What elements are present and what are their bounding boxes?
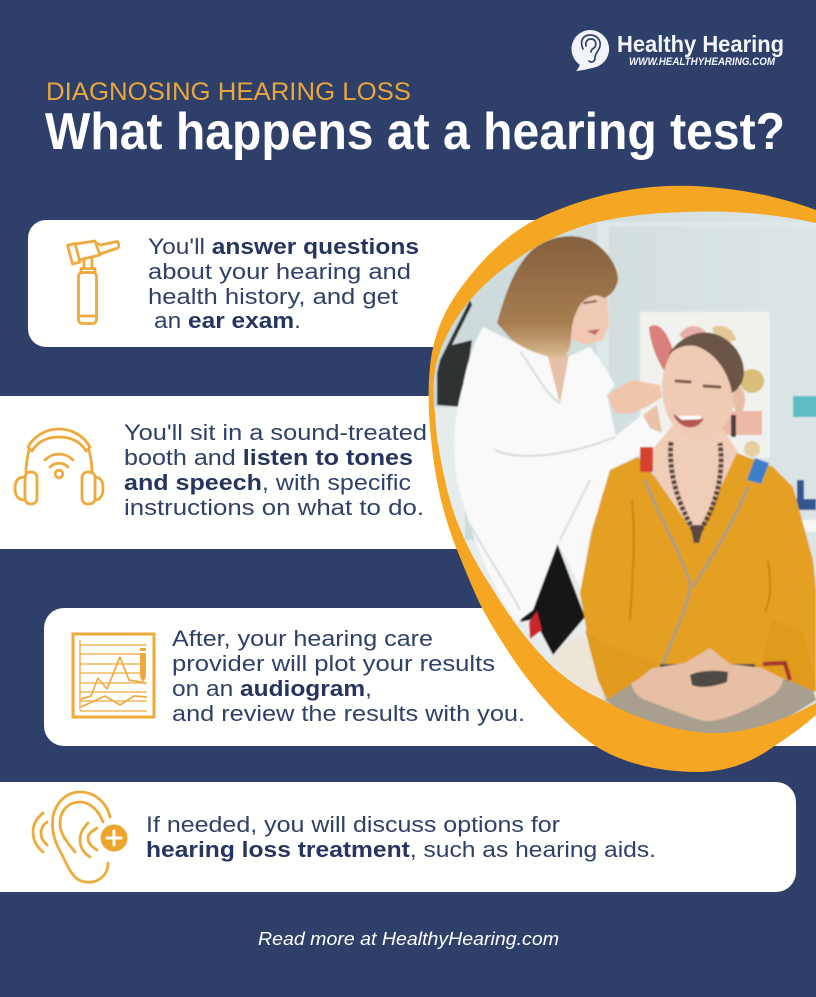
photo doctor facial features [584, 301, 600, 335]
photo blouse [580, 453, 816, 700]
photo doctor chest [547, 353, 569, 403]
photo door frame [597, 222, 694, 372]
photo doctor face [570, 290, 609, 345]
panel: step 3 card [44, 608, 816, 746]
photo doctor hair [497, 236, 618, 358]
step 2 text: You'll sit in a sound-treated [124, 420, 427, 445]
step 2 text: booth and listen to tones [124, 445, 413, 470]
photo patient head [662, 344, 735, 428]
footer link: Read more at HealthyHearing.com [258, 929, 559, 949]
step 1 text: You'll answer questions [148, 234, 419, 259]
photo coat shadows [467, 352, 615, 610]
photo doctor red accent [529, 611, 542, 639]
orange blob frame [429, 186, 816, 772]
photo patient neck and chest [652, 425, 738, 535]
step 3 text: provider will plot your results [172, 651, 495, 676]
icon: headphones with wifi [15, 429, 103, 504]
photo shelf objects [796, 480, 816, 510]
photo trousers [605, 675, 816, 735]
step 2 text [124, 420, 427, 520]
step 4 text: If needed, you will discuss options for [146, 812, 561, 837]
photo earring [731, 415, 736, 437]
photo sleeve cuffs [584, 630, 816, 700]
photo blue electrode tag [747, 458, 769, 484]
photo clasped hands [630, 648, 784, 721]
step 1 text [148, 234, 419, 333]
photo chair [550, 635, 816, 702]
logo: Healthy Hearing [571, 30, 784, 71]
step 2 text: instructions on what to do. [124, 495, 424, 520]
step 3 text: and review the results with you. [172, 701, 525, 726]
photo doctor hand [607, 380, 662, 413]
photo necklace pendant [690, 525, 704, 543]
photo lower wall [465, 540, 590, 686]
photo sleeve shadow [630, 500, 770, 620]
step 1 text: health history, and get [148, 284, 399, 309]
step 4 text [146, 812, 656, 862]
step 2 text: and speech , with specific [124, 470, 411, 495]
photo patient face details [673, 381, 720, 427]
step 4 text: hearing loss treatment , such as hearing aids. [146, 837, 656, 862]
photo: audiologist examining patient [420, 200, 816, 740]
icon: ear with plus [33, 792, 128, 882]
photo teal box [793, 396, 816, 417]
panel: step 4 card [0, 782, 796, 892]
logo url: WWW.HEALTHYHEARING.COM [629, 56, 776, 68]
photo right shelf [800, 520, 816, 532]
photo counter [434, 406, 466, 540]
icon: ear speech bubble [571, 30, 609, 71]
logo wordmark: Healthy Hearing [617, 31, 784, 57]
step 1 text: about your hearing and [148, 259, 411, 284]
panel: step 1 card [28, 220, 588, 347]
photo wall [420, 200, 816, 740]
photo monitor [437, 300, 472, 407]
panel: step 2 card [0, 396, 520, 549]
step 3 text: After, your hearing care [172, 626, 433, 651]
step 3 text: on an audiogram , [172, 676, 372, 701]
step 1 text: an ear exam . [154, 308, 301, 333]
photo belt [659, 663, 756, 668]
photo gray wires [645, 480, 748, 670]
icon: audiogram chart [73, 634, 154, 717]
photo patient hair [668, 332, 744, 393]
photo bracelet [763, 663, 790, 680]
photo far hand [643, 405, 662, 433]
photo patient ear [733, 387, 745, 413]
photo doctor coat [454, 327, 670, 622]
photo hands gap [690, 671, 728, 687]
photo doctor trousers [520, 543, 585, 655]
photo necklace [671, 442, 721, 535]
eyebrow heading: DIAGNOSING HEARING LOSS [46, 78, 411, 106]
photo wall poster [640, 312, 770, 458]
photo red electrode tag [640, 447, 653, 472]
icon: otoscope [68, 241, 119, 324]
step 3 text [172, 626, 525, 726]
